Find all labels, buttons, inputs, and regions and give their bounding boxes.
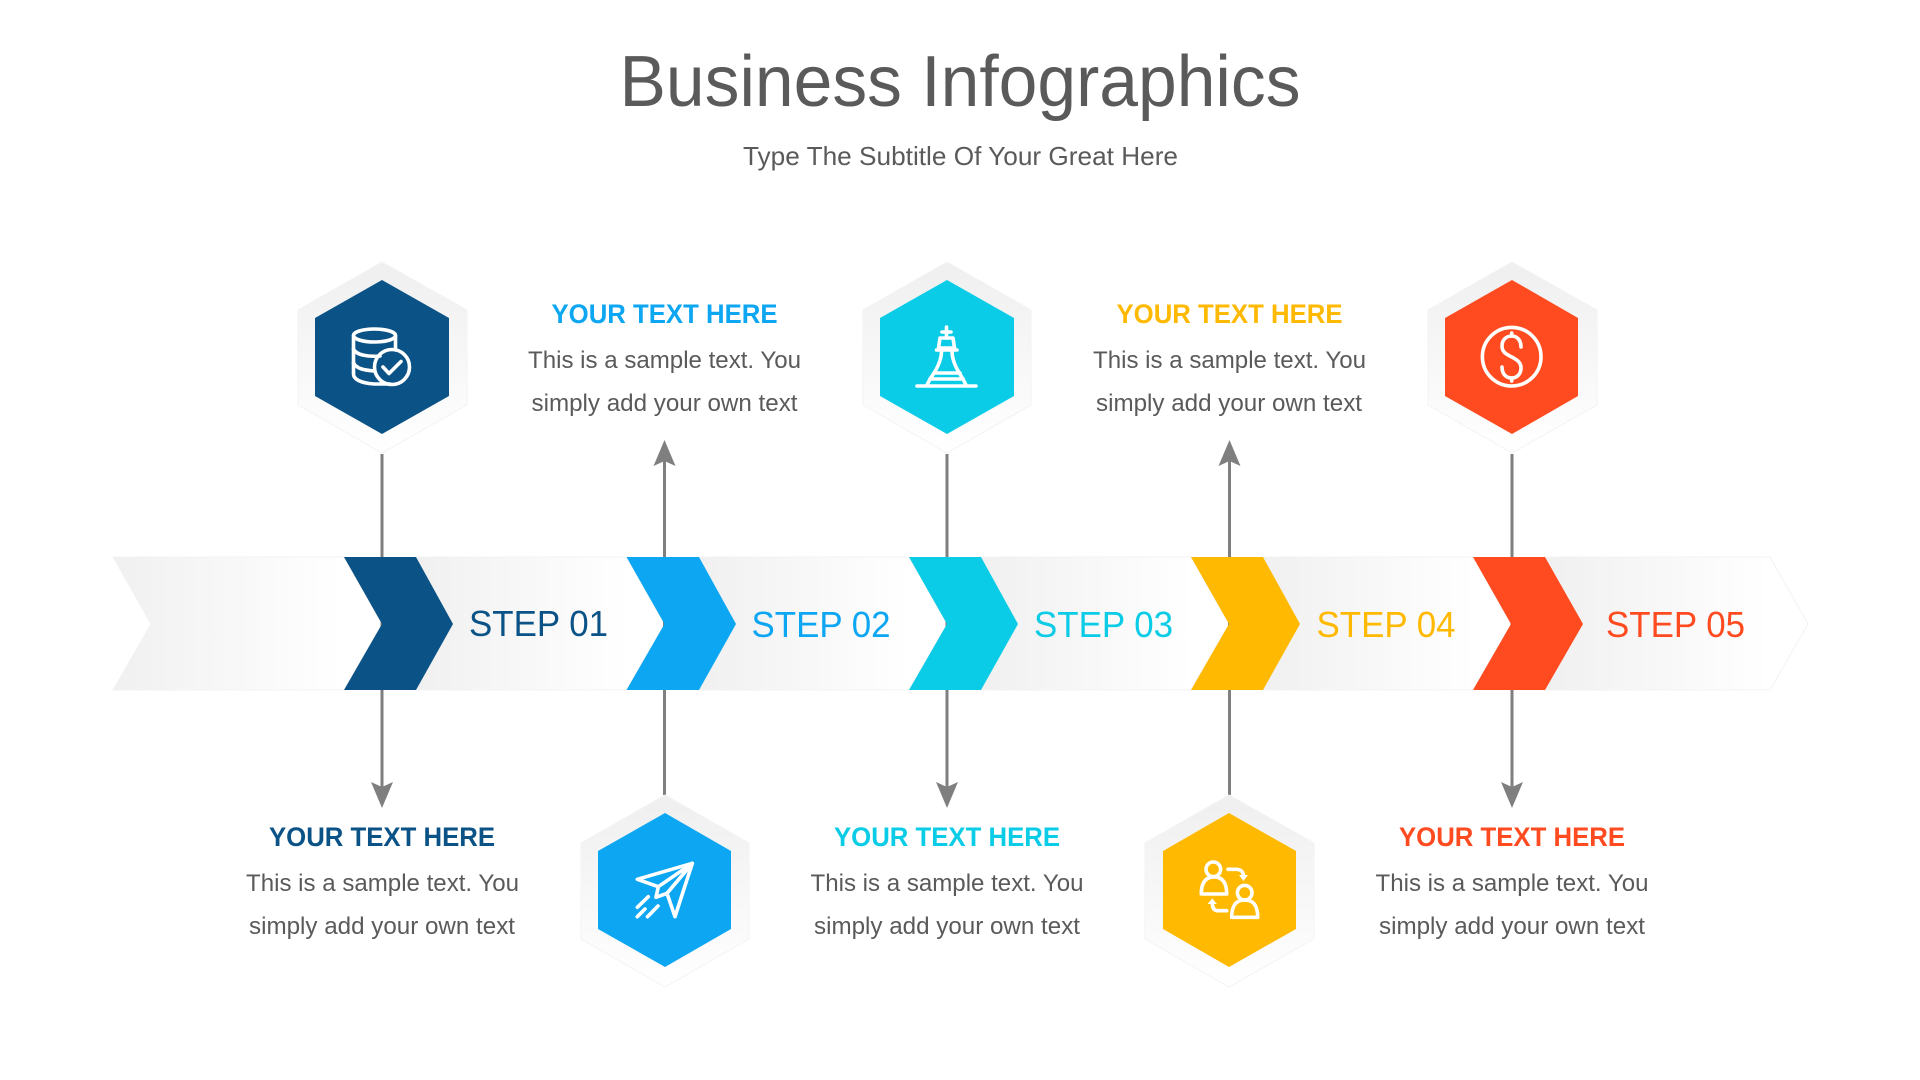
connector: step 4 up arrow [1218,440,1240,795]
icon: dollar coin [1482,327,1541,386]
text block: step 3 (bottom): This is a sample text. You [810,870,1084,897]
title: Business Infographics [620,42,1300,122]
arrow band background [113,557,1808,690]
text block: step 3 (bottom): YOUR TEXT HERE [834,822,1060,852]
text block: step 5 (bottom) [1376,822,1648,940]
hexagon: step 3 chess icon [863,262,1031,453]
label: step 05: STEP 05 [1606,604,1745,645]
text block: step 3 (bottom): simply add your own text [814,913,1080,940]
hexagon: step 5 dollar icon [1428,262,1597,453]
label: step 03: STEP 03 [1034,604,1173,645]
text block: step 1 (bottom): simply add your own text [249,913,515,940]
chevron: step 05 [1473,557,1583,690]
label: step 01: STEP 01 [469,603,608,644]
chevron: step 04 [1191,557,1300,690]
text block: step 2 (top): YOUR TEXT HERE [552,299,778,329]
hexagon: step 1 database icon [298,262,467,453]
connector: step 5 down arrow [1501,454,1523,808]
text block: step 1 (bottom) [246,822,519,940]
text block: step 1 (bottom): YOUR TEXT HERE [269,822,495,852]
text block: step 2 (top): This is a sample text. You [528,347,801,374]
hexagon: step 2 paper plane icon [581,795,749,987]
icon: database with check [354,329,410,384]
text block: step 2 (top): simply add your own text [532,390,798,417]
text block: step 5 (bottom): YOUR TEXT HERE [1399,822,1625,852]
icon: chess king [917,327,976,386]
chevron: step 03 [909,557,1018,690]
text block: step 4 (top): simply add your own text [1096,390,1362,417]
connector: step 2 up arrow [654,440,676,795]
hexagon: step 4 people exchange icon [1145,795,1314,987]
subtitle: Type The Subtitle Of Your Great Here [743,141,1178,171]
text block: step 4 (top): YOUR TEXT HERE [1116,299,1342,329]
text block: step 5 (bottom): This is a sample text. You [1376,870,1648,897]
text block: step 3 (bottom) [810,822,1084,940]
text block: step 5 (bottom): simply add your own text [1379,913,1645,940]
text block: step 1 (bottom): This is a sample text. You [246,870,519,897]
chevron: step 01 [344,557,453,690]
label: step 04: STEP 04 [1316,604,1456,645]
label: step 02: STEP 02 [752,604,890,645]
connector: step 3 down arrow [936,454,958,808]
connector: step 1 down arrow [371,454,393,808]
text block: step 4 (top): This is a sample text. You [1093,347,1366,374]
chevron: step 02 [626,557,736,690]
text block: step 4 (top) [1093,299,1366,417]
icon: people exchange [1201,862,1258,917]
icon: paper plane [637,863,692,917]
text block: step 2 (top) [528,299,801,417]
